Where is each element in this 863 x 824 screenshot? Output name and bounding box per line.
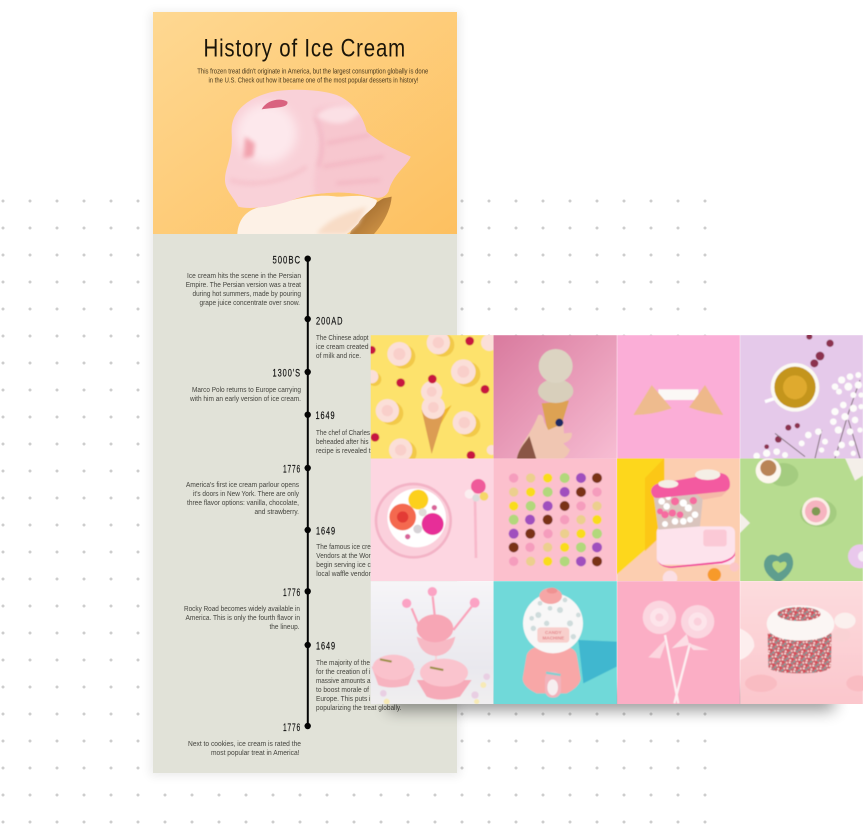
entry: 1649 majority: for the creation of i [316, 667, 371, 676]
entry: 1776 Rocky Road: the lineup. [270, 622, 300, 631]
entry: 1649 vendors: begin serving ice c [316, 560, 371, 569]
photo: gumball machine [493, 581, 617, 705]
photo: flower plate [370, 458, 494, 582]
entry: 1776 Rocky Road: America. This is only the fourth flavor in [186, 613, 300, 622]
entry: 1649 vendors: 1649 [316, 525, 336, 537]
entry: 1776 parlour: three flavor options: vanilla, chocolate, [187, 498, 299, 507]
entry: 1776 Rocky Road: 1776 [283, 587, 301, 599]
icon: ice cream photo [225, 90, 417, 234]
entry: 1649 majority: 1649 [316, 640, 336, 652]
photo: pink lollipops [617, 581, 740, 705]
entry: 1649 majority: The majority of the [316, 658, 370, 667]
entry: 1776 cookies [188, 722, 301, 757]
timeline axis [304, 256, 311, 729]
entry: 1649 Charles: recipe is revealed t [316, 446, 371, 455]
entry: 1649 majority: popularizing the treat globally. [316, 703, 402, 712]
title: History of Ice Cream [204, 34, 406, 62]
entry: 1649 Charles: beheaded after his [316, 437, 369, 446]
entry: 1649 majority: Europe. This puts i [316, 694, 371, 703]
entry: 200AD: of milk and rice. [316, 351, 361, 360]
photo: candy dispenser [617, 458, 740, 585]
photo: tea and flowers [740, 334, 863, 459]
dot grid background [0, 188, 718, 824]
entry: 1649 majority: massive amounts a [316, 676, 371, 685]
entry: 500BC: Ice cream hits the scene in the Persian [187, 271, 301, 280]
entry: 200AD: ice cream created [316, 342, 368, 351]
photo: pink sundaes [370, 581, 494, 705]
entry: 1776 parlour: America's first ice cream parlour opens [186, 480, 299, 489]
entry: 500BC [186, 254, 302, 307]
entry: 200AD [316, 315, 369, 360]
photo: coloured candies [493, 458, 617, 582]
entry: 1649 Charles: The chef of Charles [316, 428, 370, 437]
entry: 1776 parlour [186, 463, 301, 516]
entry: 1649 Charles [316, 410, 371, 455]
photo: fortune cookie [617, 335, 740, 459]
entry: 1300'S [189, 368, 301, 403]
entry: 1776 parlour: 1776 [283, 463, 301, 475]
entry: 1649 majority [316, 640, 402, 712]
entry: 1649 vendors: The famous ice cre [316, 542, 371, 551]
entry: 500BC: Empire. The Persian version was a treat [186, 280, 302, 289]
photo: yellow roses and cone [370, 335, 494, 458]
entry: 1300'S: with him an early version of ice cream. [189, 394, 301, 403]
entry: 1776 Rocky Road [184, 587, 301, 631]
photo: gumball machine: MACHINE [542, 636, 564, 641]
entry: 1776 parlour: and strawberry. [254, 507, 299, 516]
entry: 500BC: 500BC [272, 254, 301, 266]
photo collage [365, 331, 863, 710]
photo: sprinkle jar [740, 581, 863, 705]
entry: 1649 majority: to boost morale of [316, 685, 370, 694]
panel: timeline [153, 234, 457, 773]
entry: 1776 parlour: it's doors in New York. There are only [193, 489, 299, 498]
entry: 200AD: The Chinese adopt [316, 333, 369, 342]
entry: 1776 cookies: most popular treat in America! [211, 748, 300, 757]
entry: 500BC: during hot summers, made by pouring [192, 289, 301, 298]
photo: hand holding ice cream [493, 335, 617, 460]
entry: 1776 Rocky Road: Rocky Road becomes widely available in [184, 604, 300, 613]
intro text [197, 66, 428, 84]
entry: 1776 cookies: Next to cookies, ice cream is rated the [188, 739, 301, 748]
panel: header [153, 12, 457, 234]
entry: 1300'S: 1300'S [272, 368, 301, 380]
entry: 1300'S: Marco Polo returns to Europe carrying [192, 385, 301, 394]
entry: 1649 vendors [316, 525, 371, 578]
entry: 1776 cookies: 1776 [283, 722, 301, 734]
infographic poster panel [150, 12, 460, 776]
entry: 1649 vendors: Vendors at the Wor [316, 551, 371, 560]
photo: gumball machine: CANDY [545, 630, 563, 635]
intro text: This frozen treat didn't originate in America, but the largest consumption globally is done [197, 66, 428, 76]
intro text: in the U.S. Check out how it became one of the most popular desserts in history! [208, 75, 418, 84]
entry: 1649 Charles: 1649 [316, 410, 336, 422]
entry: 200AD: 200AD [316, 315, 344, 327]
entry: 1649 vendors: local waffle vendor [316, 569, 371, 578]
photo: green table with treats [740, 458, 863, 583]
entry: 500BC: grape juice concentrate over snow. [200, 298, 300, 307]
